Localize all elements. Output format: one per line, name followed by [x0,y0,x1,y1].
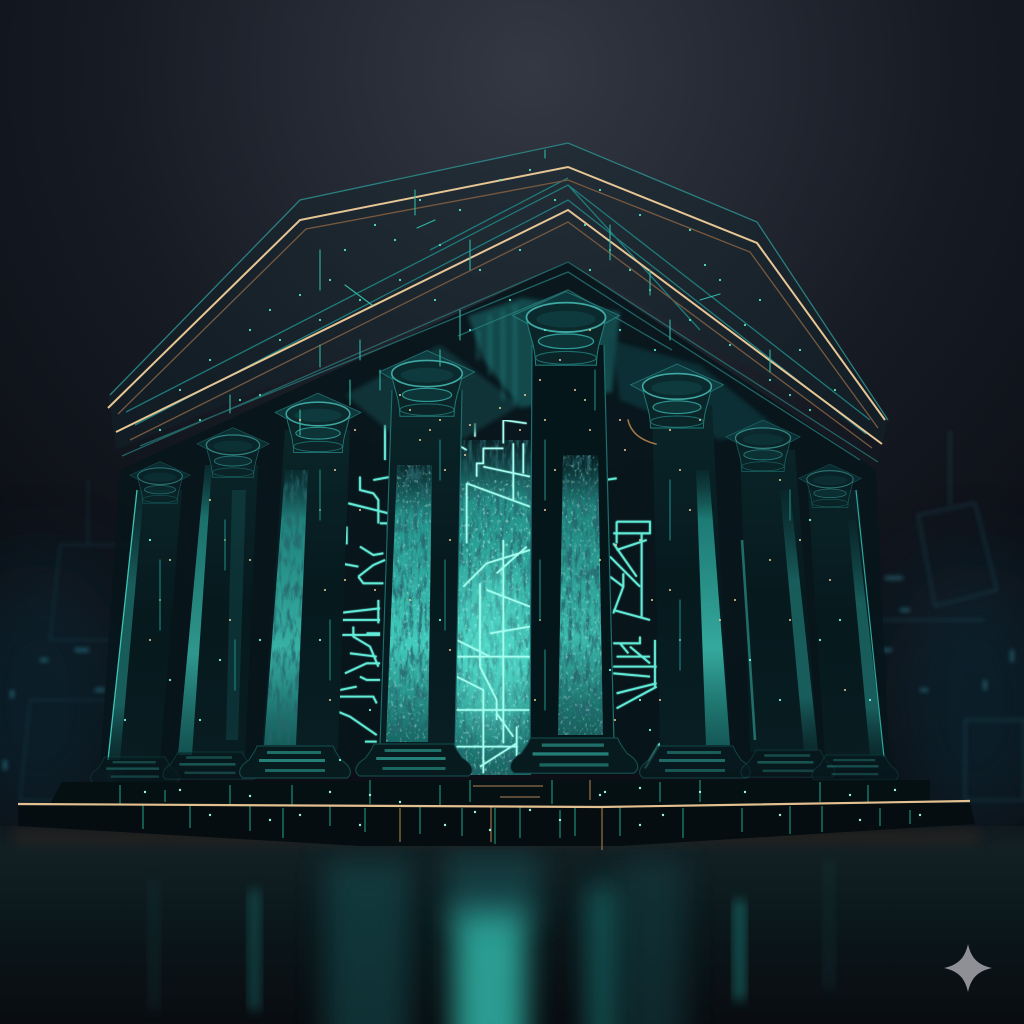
column 6 [631,364,750,778]
column 1 [91,462,190,783]
pediment glass fill [108,143,888,450]
icon: four-point sparkle watermark [944,944,992,992]
pediment bronze lines [118,180,878,448]
temple base: upper step [50,780,930,804]
pediment: glass roof [108,143,888,450]
floor: warm horizon strip [14,830,980,844]
column sparks [125,330,870,760]
background: blurred circuit city right [870,430,1024,840]
column 7 [726,420,835,777]
ceiling beams [122,262,878,462]
column 8 [799,464,898,780]
pediment outer glass edge [110,143,888,420]
pediment inner teal lines [126,178,870,434]
column 4 [356,351,475,776]
background: blurred circuit city left [0,480,130,840]
pediment lower gold line [116,210,882,444]
temple interior: dark backing [100,262,890,770]
ceiling: teal soffit glow [345,298,780,440]
floor: reflective surface [0,826,1024,1024]
column 5 [510,292,638,773]
circuit panel: right [605,478,660,768]
column 2 [163,428,269,779]
column 3 [240,393,361,778]
temple base: lower step [18,803,975,846]
pediment sparks [160,150,835,435]
central glowing circuit core [453,420,531,775]
circuit panel: left [330,425,392,742]
pediment upper gold line [108,167,885,420]
circuit panels behind columns [330,425,660,768]
base circuit marks [120,780,920,850]
base gold line [18,801,970,807]
floor reflections [150,855,833,1024]
